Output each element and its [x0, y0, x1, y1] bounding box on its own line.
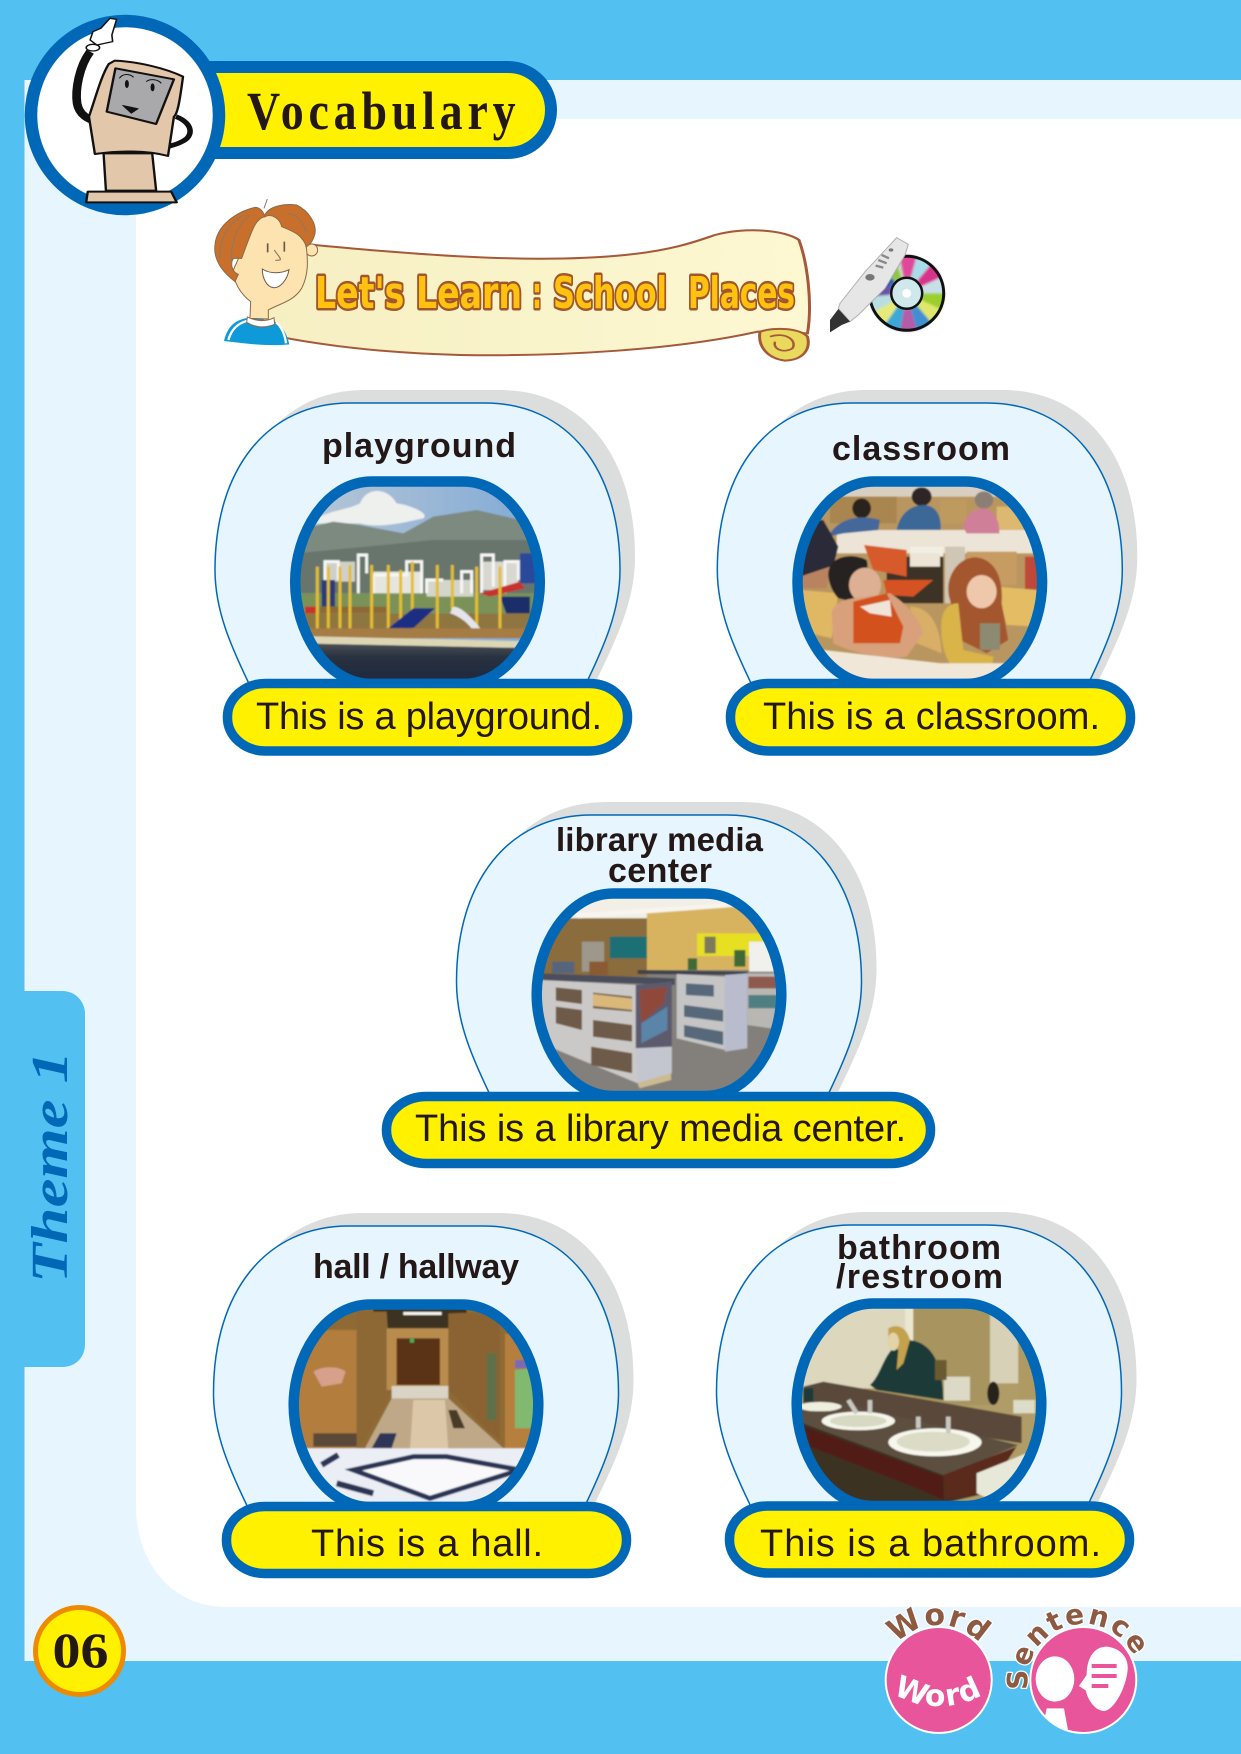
icon: sentence button	[1005, 1608, 1145, 1734]
card shadow	[732, 390, 1137, 679]
photo ring	[537, 894, 781, 1096]
icon: word button	[883, 1606, 994, 1734]
scroll banner	[262, 230, 809, 361]
card panel	[717, 403, 1122, 692]
page number badge: 06	[52, 1622, 108, 1678]
card panel	[456, 815, 862, 1104]
sentence: This is a hall.	[311, 1523, 543, 1565]
photo: library	[539, 895, 784, 1095]
photo ring	[798, 482, 1042, 684]
card panel	[215, 403, 620, 692]
card: playground	[215, 390, 635, 751]
label: classroom: classroom	[832, 430, 1010, 468]
card shadow	[732, 1212, 1136, 1501]
sentence pill	[226, 1506, 626, 1574]
card: bathroom / restroom	[716, 1212, 1136, 1573]
photo: classroom	[800, 483, 1043, 683]
sentence: This is a classroom.	[763, 696, 1100, 738]
card shadow	[472, 802, 876, 1091]
sentence: This is a bathroom.	[760, 1523, 1101, 1565]
side tab: Theme 1: Theme 1	[22, 1051, 79, 1283]
page number badge	[36, 1608, 124, 1694]
photo: hallway	[298, 1310, 534, 1502]
label: bathroom /restroom	[836, 1229, 1003, 1296]
banner: Let's Learn School Places	[215, 199, 809, 361]
card shadow	[228, 1213, 634, 1502]
photo ring	[797, 1304, 1041, 1506]
photo: playground	[300, 486, 535, 679]
header: Vocabulary pill: Vocabulary	[247, 81, 516, 141]
icon: sentence button: Sentence	[1005, 1608, 1145, 1689]
card panel	[214, 1226, 618, 1515]
label: bathroom /restroom: bathroom	[837, 1229, 1001, 1267]
label: hall / hallway: hall / hallway	[313, 1248, 519, 1286]
label: bathroom /restroom: /restroom	[836, 1258, 1003, 1296]
sentence pill	[730, 684, 1130, 751]
label: library media center: library media	[556, 821, 764, 858]
card panel	[716, 1225, 1122, 1514]
banner title text	[315, 268, 795, 319]
photo ring	[294, 1304, 538, 1507]
sentence: This is a playground.	[256, 696, 602, 738]
sentence: This is a library media center.	[415, 1108, 906, 1150]
banner title text: Let's Learn	[315, 268, 522, 319]
sentence pill	[730, 1506, 1130, 1573]
sentence pill	[386, 1096, 930, 1164]
card: hall / hallway	[214, 1213, 634, 1574]
white content area	[136, 119, 1241, 1607]
icon: robot mascot in circle	[31, 18, 219, 209]
icon: word button: Word	[883, 1606, 994, 1642]
header: Vocabulary pill	[150, 67, 551, 153]
card: library media center	[386, 802, 930, 1164]
banner title text: School	[553, 268, 667, 319]
side tab: Theme 1	[0, 991, 85, 1367]
icon: word button: Word	[898, 1674, 980, 1706]
banner title text: :	[532, 268, 542, 319]
banner title text: Places	[688, 268, 795, 319]
sentence pill	[228, 684, 628, 751]
icon: boy character	[215, 199, 318, 345]
card shadow	[230, 390, 635, 679]
label: playground: playground	[322, 427, 516, 465]
card: classroom	[717, 390, 1137, 751]
label: library media center: center	[608, 852, 712, 890]
photo ring	[295, 482, 540, 684]
photo: bathroom	[798, 1305, 1040, 1505]
label: library media center	[556, 821, 764, 890]
icon: reader pen and CD	[830, 238, 945, 332]
